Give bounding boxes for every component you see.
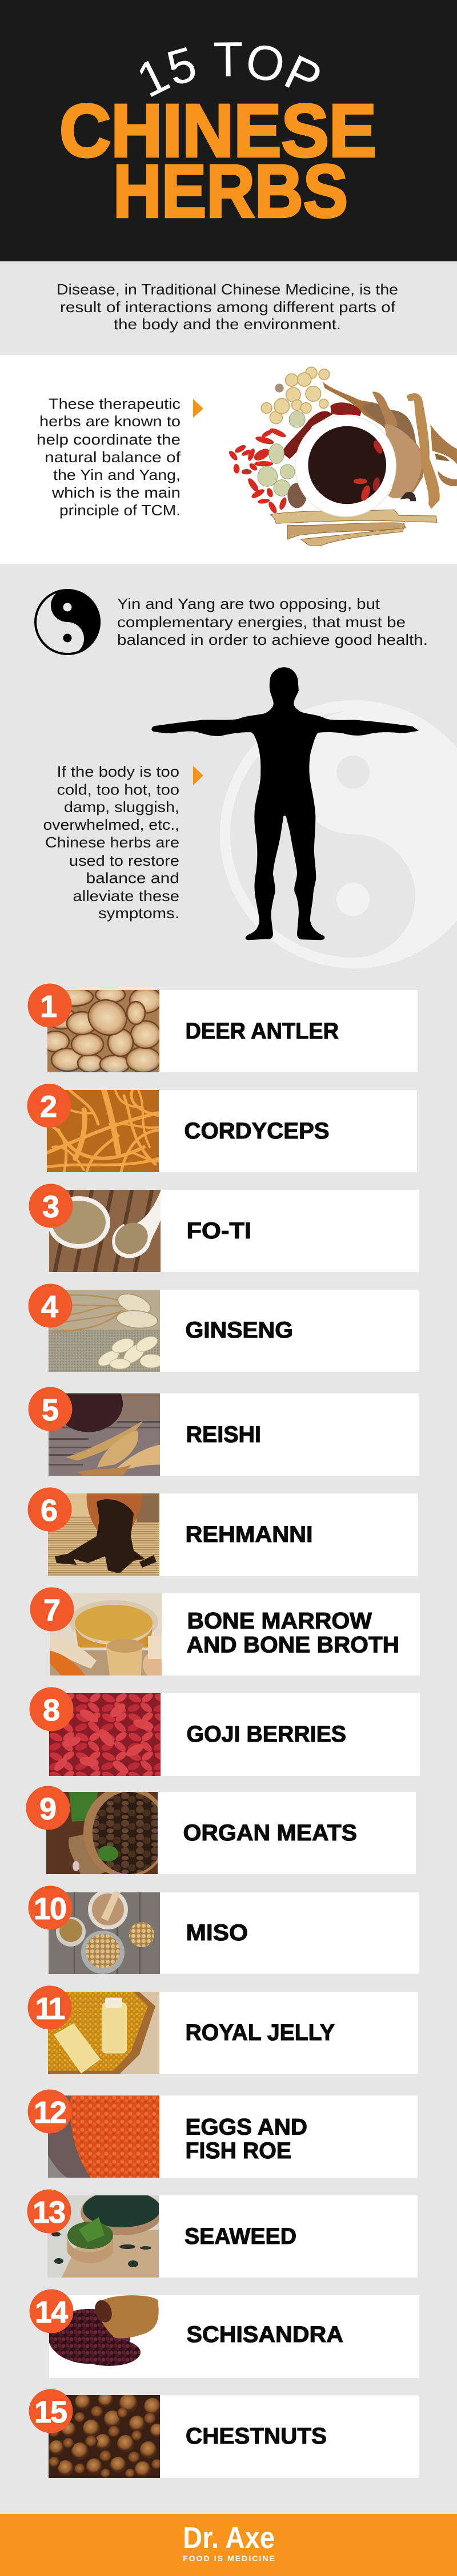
item 9: organ meats — [26, 1786, 416, 1878]
badge 2: 2 — [40, 1090, 57, 1124]
photo: fo-ti powder — [49, 1190, 161, 1272]
badge 14 — [30, 2290, 73, 2333]
item 11: royal jelly — [27, 1986, 418, 2074]
label: FO-TI — [186, 1218, 251, 1243]
text: body imbalance: used to restore — [69, 852, 179, 869]
badge 8: 8 — [43, 1693, 60, 1727]
photo: goji berries — [49, 1693, 161, 1776]
header panel — [0, 0, 457, 261]
photo: organ meats — [46, 1792, 158, 1874]
intro text panel: Disease, in Traditional Chinese Medicine, is the — [57, 281, 398, 298]
label: AND BONE BROTH — [186, 1632, 399, 1657]
badge 7: 7 — [43, 1593, 61, 1628]
label: REISHI — [186, 1422, 261, 1447]
title: chinese herbs: HERBS — [113, 149, 348, 233]
title: chinese herbs: CHINESE — [59, 88, 376, 172]
label — [186, 1608, 399, 1657]
item 7: bone marrow and bone broth — [30, 1588, 420, 1678]
text: therapeutic herbs: These therapeutic — [49, 395, 181, 412]
text: body imbalance: overwhelmed, etc., — [43, 816, 179, 833]
badge 10 — [29, 1885, 72, 1930]
badge 3 — [29, 1184, 73, 1228]
text: body imbalance: cold, too hot, too — [57, 781, 179, 798]
footer — [0, 2514, 457, 2576]
badge 4 — [29, 1284, 72, 1327]
panel: therapeutic herbs — [0, 355, 457, 564]
text: therapeutic herbs: which is the main — [51, 484, 181, 501]
label: MISO — [186, 1920, 248, 1945]
text: therapeutic herbs: help coordinate the — [37, 431, 181, 448]
label — [185, 2115, 307, 2163]
intro text panel — [0, 261, 457, 355]
badge 12 — [27, 2090, 72, 2133]
badge 9 — [26, 1786, 70, 1830]
title: 15 top: 15 TOP — [139, 42, 320, 97]
badge 5 — [29, 1387, 72, 1431]
badge 8 — [30, 1687, 73, 1731]
text: therapeutic herbs: natural balance of — [45, 449, 181, 466]
photo: fish roe — [48, 2095, 159, 2178]
text: body imbalance: damp, sluggish, — [64, 798, 179, 815]
badge 3: 3 — [42, 1190, 59, 1224]
text: yin and yang: complementary energies, that must be — [117, 613, 406, 631]
photo: rehmanni root — [48, 1493, 159, 1576]
photo: miso — [49, 1892, 160, 1974]
badge 10: 10 — [34, 1892, 66, 1926]
badge 12: 12 — [34, 2095, 66, 2130]
text: therapeutic herbs — [37, 395, 181, 519]
label: FISH ROE — [185, 2138, 291, 2163]
item 12: eggs and fish roe — [27, 2090, 418, 2178]
text: body imbalance — [43, 763, 179, 922]
item 6: rehmanni — [27, 1487, 418, 1576]
item 2: cordyceps — [27, 1084, 417, 1172]
badge 1 — [27, 984, 72, 1027]
photo: ginseng roots — [49, 1290, 160, 1372]
label: SEAWEED — [185, 2224, 296, 2249]
text: therapeutic herbs: principle of TCM. — [59, 502, 181, 519]
item 3: fo-ti — [29, 1184, 419, 1272]
tagline: FOOD IS MEDICINE — [183, 2554, 275, 2563]
badge 11: 11 — [35, 1992, 65, 2026]
item 10: miso — [29, 1885, 419, 1974]
label: GINSENG — [185, 1318, 293, 1343]
label: ORGAN MEATS — [183, 1820, 357, 1846]
text: therapeutic herbs: the Yin and Yang, — [53, 466, 181, 483]
photo: bone broth — [50, 1593, 162, 1675]
item 13: seaweed — [27, 2189, 418, 2278]
label: DEER ANTLER — [185, 1019, 339, 1044]
badge 5: 5 — [42, 1393, 59, 1427]
badge 9: 9 — [39, 1792, 57, 1826]
text: yin and yang: balanced in order to achieve good health. — [117, 631, 428, 648]
badge 13 — [27, 2189, 71, 2234]
item 15: chestnuts — [29, 2389, 419, 2479]
text: body imbalance: If the body is too — [57, 763, 179, 780]
bowl — [295, 415, 396, 516]
badge 7 — [30, 1588, 74, 1631]
photo: seaweed — [47, 2195, 159, 2278]
icon: yin yang — [35, 589, 101, 655]
badge 15 — [29, 2389, 73, 2433]
photo: cordyceps — [47, 1090, 159, 1172]
badge 6 — [27, 1487, 72, 1532]
badge 15: 15 — [34, 2395, 67, 2429]
intro text panel: the body and the environment. — [114, 316, 341, 333]
text: yin and yang: Yin and Yang are two opposing, but — [117, 595, 380, 612]
text: yin and yang — [117, 595, 428, 648]
label: GOJI BERRIES — [186, 1722, 346, 1747]
photo: reishi mushrooms — [49, 1394, 160, 1476]
badge 11 — [27, 1986, 72, 2029]
label: EGGS AND — [185, 2115, 307, 2140]
photo: royal jelly — [48, 1992, 159, 2074]
title: chinese herbs — [59, 88, 376, 233]
badge 13: 13 — [33, 2195, 65, 2230]
photo: deer antler slices — [47, 990, 159, 1072]
panel: yin and yang explanation — [35, 589, 428, 655]
badge 1: 1 — [40, 990, 57, 1024]
label: REHMANNI — [185, 1522, 313, 1547]
human body silhouette — [151, 667, 419, 940]
image: herbs and bowl of tea — [227, 367, 457, 546]
text: body imbalance: Chinese herbs are — [45, 834, 179, 851]
badge 4: 4 — [41, 1290, 58, 1324]
item 8: goji berries — [30, 1687, 420, 1776]
arrow — [193, 399, 203, 418]
badge 14: 14 — [35, 2295, 68, 2329]
logo: dr. axe: Dr. Axe — [183, 2521, 275, 2555]
item 5: reishi — [29, 1375, 419, 1476]
badge 2 — [27, 1084, 71, 1128]
photo: chestnuts — [49, 2395, 160, 2478]
text: therapeutic herbs: herbs are known to — [39, 413, 181, 430]
label: CORDYCEPS — [184, 1119, 329, 1144]
text: body imbalance: balance and — [86, 870, 179, 887]
arrow — [193, 766, 203, 785]
label: ROYAL JELLY — [185, 2020, 335, 2045]
text: body imbalance: symptoms. — [98, 905, 179, 922]
badge 6: 6 — [41, 1493, 58, 1528]
label: BONE MARROW — [187, 1608, 372, 1633]
background yin yang symbol — [220, 700, 457, 968]
text: body imbalance: alleviate these — [73, 887, 179, 905]
item 14: schisandra — [30, 2290, 419, 2378]
item 4: ginseng — [29, 1284, 419, 1372]
photo: schisandra berries — [49, 2295, 159, 2366]
label: SCHISANDRA — [186, 2322, 343, 2347]
label: CHESTNUTS — [186, 2424, 327, 2449]
intro text panel: result of interactions among different parts of — [60, 298, 396, 316]
item 1: deer antler — [27, 984, 418, 1073]
